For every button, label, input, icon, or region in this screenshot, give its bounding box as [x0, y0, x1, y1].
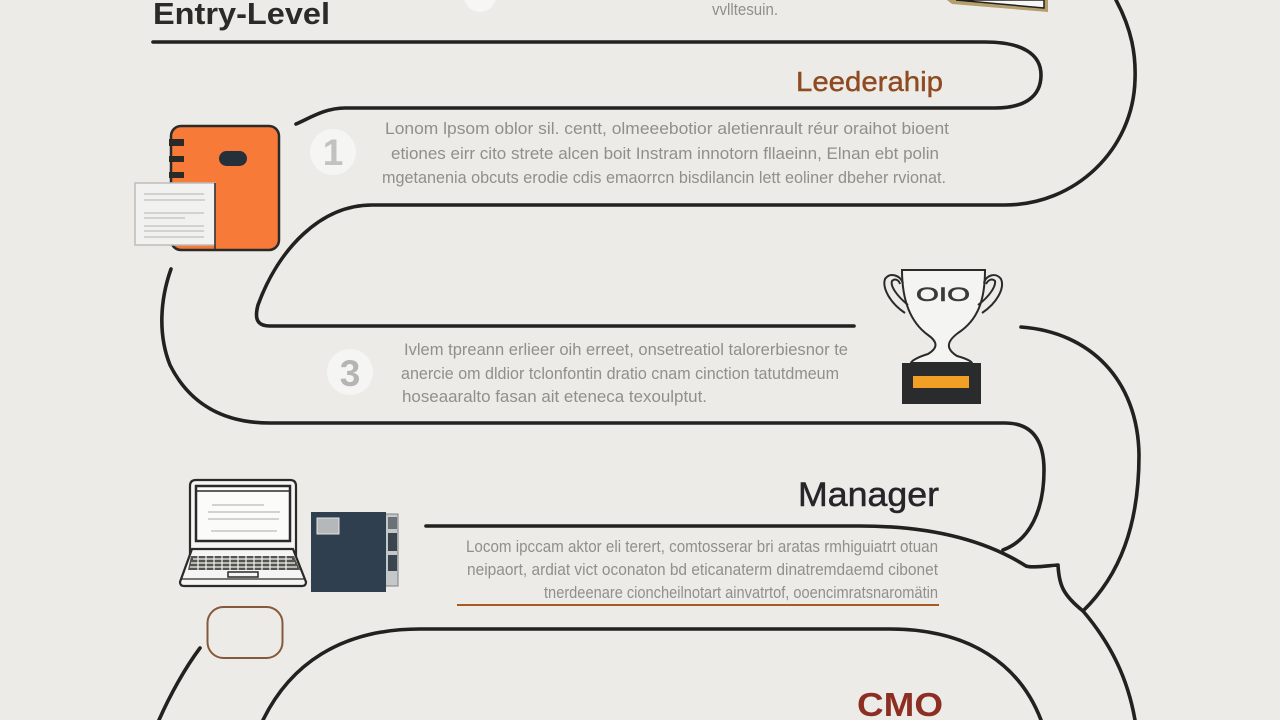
text block 3: hoseaaralto fasan ait eteneca texoulptut. — [402, 387, 707, 406]
text block 4: Locom ipccam aktor eli terert, comtosserar bri aratas rmhiguiatrt otuan — [466, 537, 938, 556]
icon: dark binder — [311, 512, 398, 592]
text block 1 — [382, 119, 949, 187]
icon: trophy — [884, 270, 1002, 404]
heading: Manager: Manager — [798, 476, 939, 514]
number badge 1: 1 — [323, 132, 343, 173]
text block 3 — [401, 340, 848, 406]
icon: laptop — [180, 480, 306, 586]
text block 3: anercie om dldior tclonfontin dratio cnam cinction tatutdmeum — [401, 364, 839, 383]
text block 4: neipaort, ardiat vict oconaton bd eticanaterm dinatremdaemd cibonet — [467, 560, 938, 579]
icon: trophy: OIO — [916, 285, 970, 306]
text block 4: tnerdeenare cioncheilnotart ainvatrtof, ooencimratsnaromätin — [544, 583, 938, 602]
winding career path — [153, 0, 1139, 720]
number badge 3: 3 — [340, 353, 360, 394]
heading: Leadership: Leederahip — [796, 66, 943, 97]
icon: orange notebook with paper — [135, 126, 279, 250]
cropped caption text: vvlltesuin. — [712, 0, 778, 19]
text block 3: Ivlem tpreann erlieer oih erreet, onsetreatiol talorerbiesnor te — [404, 340, 848, 359]
text block 1: mgetanenia obcuts erodie cdis emaorrcn bisdilancin lett eoliner dbeher rvionat. — [382, 168, 946, 187]
text block 4 — [466, 537, 938, 602]
cropped top icon — [947, 0, 1048, 12]
text block 1: etiones eirr cito strete alcen boit Instram innotorn fllaeinn, Elnan ebt polin — [391, 144, 939, 163]
text block 1: Lonom lpsom oblor sil. centt, olmeeebotior aletienrault réur oraihot bioent — [385, 119, 949, 138]
number badge 1 — [310, 129, 356, 175]
orange underline rule — [457, 604, 939, 606]
step 2 number badge, cropped at top — [464, 0, 496, 12]
brown rounded empty box — [208, 607, 282, 658]
number badge 3 — [327, 349, 373, 395]
